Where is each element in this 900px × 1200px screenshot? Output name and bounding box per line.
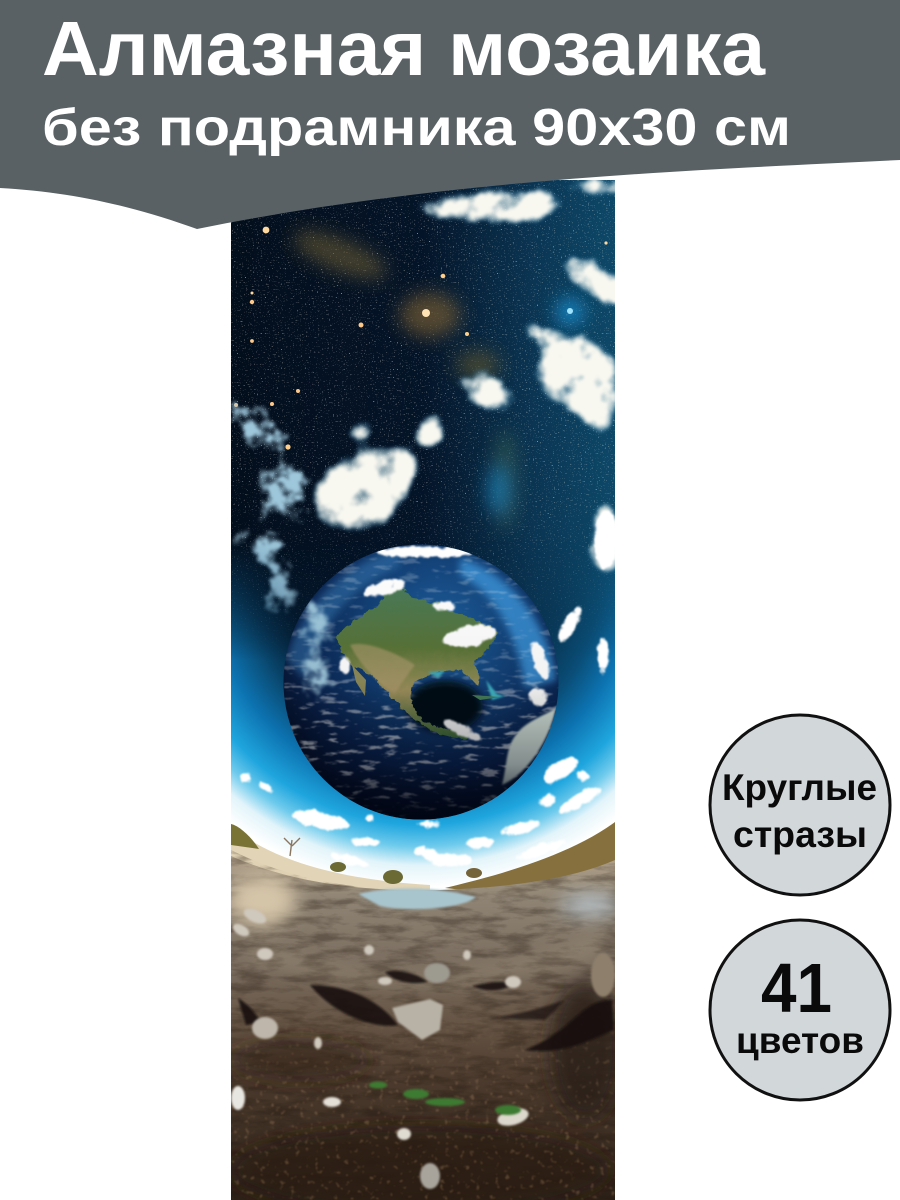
soft tonal patches — [228, 874, 621, 1200]
puddle reflecting sky — [358, 888, 476, 909]
Gulf and Pacific dark water — [407, 680, 483, 732]
small sky clouds — [237, 752, 606, 871]
rocks and pebbles — [231, 905, 615, 1189]
subtitle: без подрамника 90х30 см — [42, 99, 791, 157]
banner shape — [0, 0, 900, 229]
badge text: Круглые — [722, 767, 877, 808]
rock shadows — [238, 971, 614, 1051]
desert tones — [350, 644, 415, 694]
milky way glow — [288, 221, 584, 530]
North America landmass — [337, 588, 497, 739]
soil shading clipped to ground — [228, 850, 621, 1200]
main ground surface — [231, 856, 615, 1200]
wispy blue clouds at left — [231, 399, 316, 614]
clouds upper sky — [311, 180, 615, 574]
small clouds at the sides of the globe — [557, 510, 615, 676]
bright stars — [234, 227, 608, 450]
star field — [231, 180, 615, 644]
swirl storm at left of globe — [300, 595, 332, 701]
colour count: 41 — [761, 949, 832, 1027]
bare tree — [284, 838, 300, 856]
Earth globe — [283, 544, 559, 820]
badge circle — [710, 715, 890, 895]
badge: 41 colours — [710, 920, 890, 1100]
colours label: цветов — [736, 1020, 864, 1061]
badge circle — [710, 920, 890, 1100]
pebble speckle in foreground — [231, 990, 615, 1200]
banded ocean clouds — [284, 545, 559, 820]
ground — [228, 822, 621, 1200]
green grass patch — [369, 1082, 521, 1115]
title: Алмазная мозаика — [42, 6, 766, 92]
Caribbean turquoise — [486, 680, 505, 700]
space background — [231, 180, 615, 688]
bright limb ocean at right — [286, 548, 556, 688]
Caribbean islands — [472, 695, 500, 700]
far grass right — [445, 822, 615, 891]
globe terminator shade — [284, 636, 558, 820]
badge: round rhinestones: стразы — [733, 814, 867, 855]
shrubs on horizon — [330, 862, 482, 884]
South America bright lobe — [502, 708, 556, 785]
header banner — [0, 0, 900, 229]
bright atmosphere bowl — [231, 540, 615, 900]
streaked soil texture — [231, 850, 615, 1200]
light sand bank left — [231, 842, 430, 890]
badge: round rhinestones — [710, 715, 890, 895]
panel: diamond mosaic picture of Earth — [220, 176, 638, 1200]
bush at left — [231, 824, 259, 849]
ocean — [283, 544, 559, 820]
cloud systems on the globe — [339, 546, 554, 745]
Baja peninsula — [352, 665, 366, 696]
